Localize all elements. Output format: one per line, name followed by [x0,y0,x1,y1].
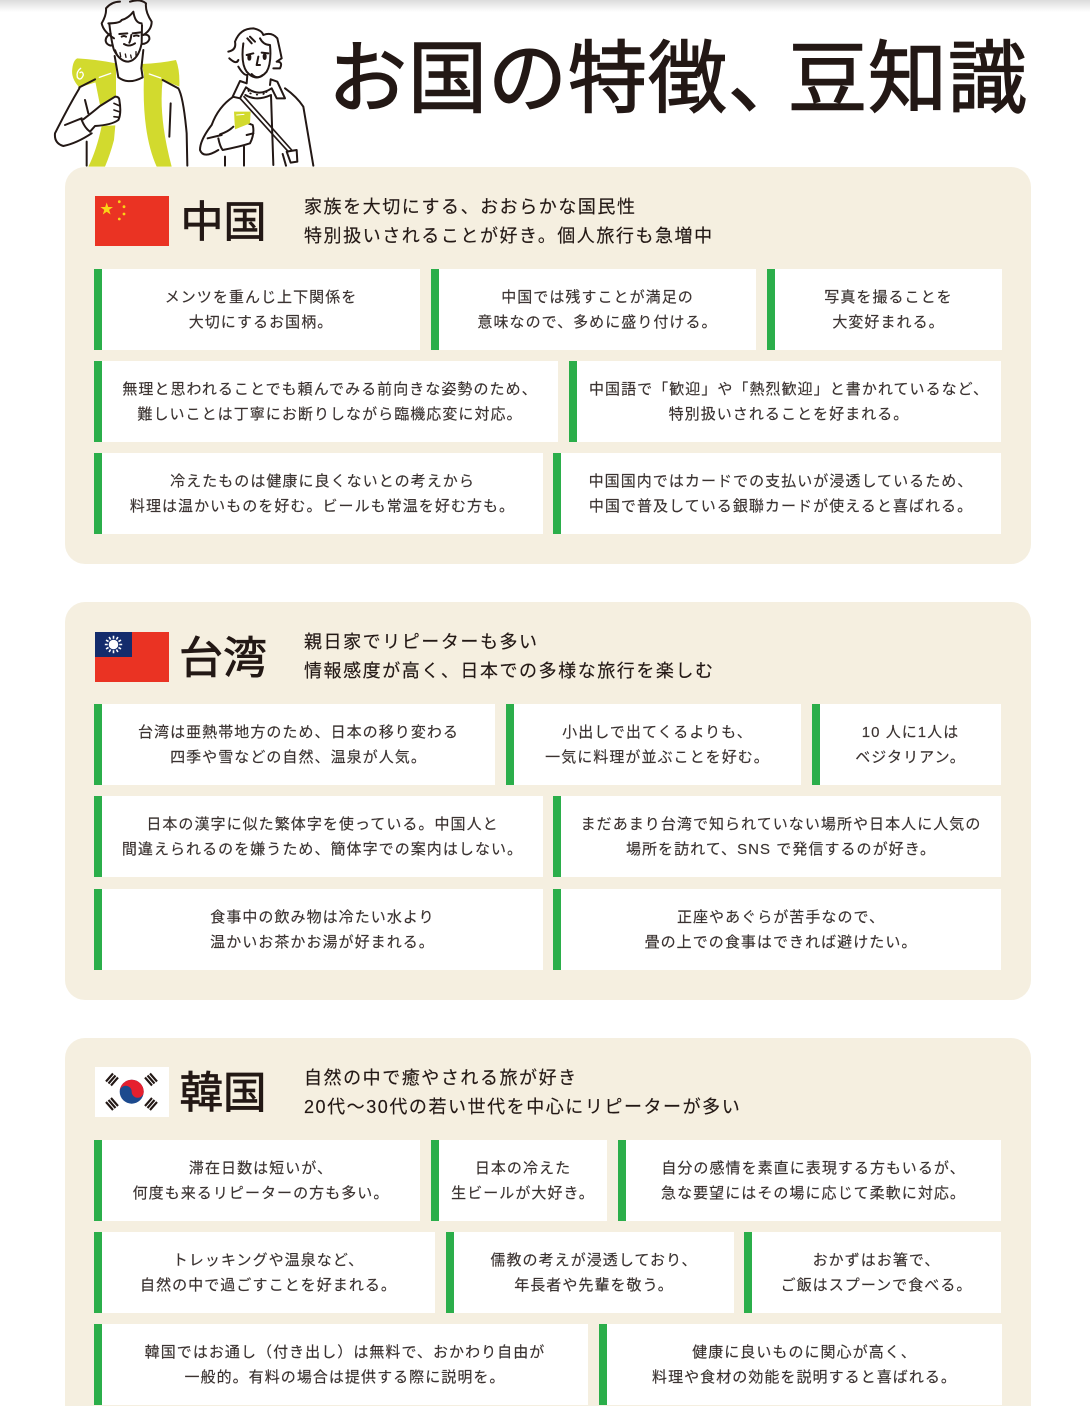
card: China 7: 中国国内ではカードでの支払いが浸透しているため、 [589,472,973,490]
card: Korea 6: おかずはお箸で、 [813,1252,940,1268]
card: Taiwan 4 [94,796,543,877]
card: Korea 7: 一般的。有料の場合は提供する際に説明を。 [184,1369,506,1386]
card: China 7: 中国で普及している銀聯カードが使えると喜ばれる。 [589,498,973,515]
card: Korea 2: 生ビールが大好き。 [451,1185,595,1202]
card: Taiwan 5: 場所を訪れて、SNS で発信するのが好き。 [626,841,936,858]
card: China 4 [94,361,558,442]
card: Korea 1: 滞在日数は短いが、 [189,1160,333,1176]
card: Taiwan 5 [553,796,1001,877]
card: China 3 [767,269,1002,350]
card: China 3: 大変好まれる。 [832,314,945,331]
card: Taiwan 7 [553,889,1001,970]
text: Taiwan summary [304,632,715,681]
text: China summary: 家族を大切にする、おおらかな国民性 [304,197,637,217]
card: Korea 4: トレッキングや温泉など、 [173,1252,364,1268]
top shadow [0,0,1090,12]
card: Taiwan 5: まだあまり台湾で知られていない場所や日本人に人気の [581,816,981,832]
card: Korea 5: 年長者や先輩を敬う。 [514,1277,674,1294]
card: China 6: 冷えたものは健康に良くないとの考えから [170,472,475,490]
card: Taiwan 1 [94,704,495,785]
card: Taiwan 1: 四季や雪などの自然、温泉が人気。 [170,749,427,766]
card: China 4: 難しいことは丁寧にお断りしながら臨機応変に対応。 [137,406,523,423]
heading: Taiwan: 台湾 [179,634,267,683]
heading: China: 中国 [180,199,266,247]
card: Korea 5 [446,1232,734,1313]
card: Korea 8: 料理や食材の効能を説明すると喜ばれる。 [652,1369,957,1386]
man [55,0,187,166]
illustration: travellers [54,0,314,167]
card: Korea 7 [94,1324,588,1405]
card: Korea 5: 儒教の考えが浸透しており、 [490,1252,698,1268]
panel: Korea [65,1038,1031,1406]
card: Korea 8: 健康に良いものに関心が高く、 [692,1344,917,1360]
text: Taiwan summary: 親日家でリピーターも多い [304,632,539,652]
card: Korea 3: 急な要望にはその場に応じて柔軟に対応。 [661,1185,966,1202]
card: Taiwan 4: 間違えられるのを嫌うため、簡体字での案内はしない。 [122,841,523,858]
card: China 5: 特別扱いされることを好まれる。 [669,406,909,423]
card: China 6: 料理は温かいものを好む。ビールも常温を好む方も。 [130,498,515,515]
card: Korea 6 [744,1232,1001,1313]
card: China 4: 無理と思われることでも頼んでみる前向きな姿勢のため、 [122,380,538,398]
card: Korea 2: 日本の冷えた [475,1160,571,1176]
card: China 1: メンツを重んじ上下関係を [165,288,357,306]
icon: Taiwan flag [95,632,169,682]
card: Korea 4: 自然の中で過ごすことを好まれる。 [140,1277,397,1294]
panel: China [65,167,1031,564]
card: Taiwan 2 [506,704,801,785]
card: China 5: 中国語で「歓迎」や「熱烈歓迎」と書かれているなど、 [589,380,989,398]
card: China 2: 意味なので、多めに盛り付ける。 [477,314,718,331]
card: Taiwan 7: 正座やあぐらが苦手なので、 [677,908,885,926]
card: Taiwan 4: 日本の漢字に似た繁体字を使っている。中国人と [146,816,499,832]
card: Korea 3 [618,1140,1001,1221]
card: Taiwan 3: 10 人に1人は [862,724,959,740]
heading: Korea: 韓国 [180,1070,266,1118]
card: China 6 [94,453,543,534]
card: Korea 3: 自分の感情を素直に表現する方もいるが、 [661,1160,966,1176]
card: Taiwan 6: 温かいお茶かお湯が好まれる。 [210,934,435,951]
card: Korea 8 [599,1324,1002,1405]
woman [200,28,313,166]
icon: China flag [95,196,169,246]
card: Taiwan 3: ベジタリアン。 [855,749,966,766]
card: Taiwan 6: 食事中の飲み物は冷たい水より [210,908,435,926]
card: Korea 7: 韓国ではお通し（付き出し）は無料で、おかわり自由が [145,1344,545,1360]
title: お国の特徴、豆知識 [328,34,1028,123]
text: Korea summary: 自然の中で癒やされる旅が好き [304,1068,578,1088]
card: Taiwan 3 [812,704,1001,785]
card: Taiwan 7: 畳の上での食事はできれば避けたい。 [645,934,917,951]
text: Korea summary: 20代～30代の若い世代を中心にリピーターが多い [304,1097,741,1117]
card: China 5 [569,361,1001,442]
card: China 1: 大切にするお国柄。 [189,314,333,331]
card: China 1 [94,269,420,350]
card: Korea 4 [94,1232,435,1313]
card: China 3: 写真を撮ることを [824,288,953,306]
icon: Korea flag [95,1067,169,1117]
panel: Taiwan [65,602,1031,1000]
text: Taiwan summary: 情報感度が高く、日本での多様な旅行を楽しむ [304,661,715,681]
card: Taiwan 2: 小出しで出てくるよりも、 [562,724,753,740]
card: China 2 [431,269,756,350]
text: China summary [304,197,714,246]
card: Korea 2 [431,1140,607,1221]
text: Korea summary [304,1068,741,1117]
card: Korea 6: ご飯はスプーンで食べる。 [781,1277,972,1294]
card: Taiwan 6 [94,889,543,970]
card: Taiwan 1: 台湾は亜熱帯地方のため、日本の移り変わる [138,724,459,740]
card: Korea 1: 何度も来るリピーターの方も多い。 [133,1185,389,1202]
card: China 7 [553,453,1001,534]
text: China summary: 特別扱いされることが好き。個人旅行も急増中 [304,226,714,246]
card: Korea 1 [94,1140,420,1221]
backpack [72,58,179,167]
card: Taiwan 2: 一気に料理が並ぶことを好む。 [545,749,770,766]
card: China 2: 中国では残すことが満足の [501,288,694,306]
